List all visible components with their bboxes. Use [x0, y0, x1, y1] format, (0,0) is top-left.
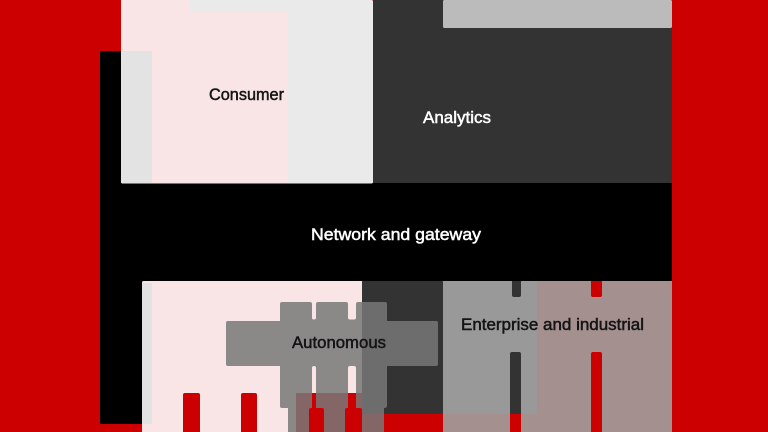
gaps in connector: lower pink notches — [312, 366, 356, 408]
label: consumer: Consumer — [209, 85, 284, 104]
label: analytics: Analytics — [423, 108, 491, 127]
icon: translucent grey connector — [226, 302, 438, 432]
panel: analytics — [373, 0, 672, 183]
panel: autonomous — [142, 281, 443, 432]
bars: red — [510, 281, 602, 432]
bars: dark — [510, 281, 521, 414]
bars: left red — [183, 393, 257, 432]
panel: consumer — [121, 0, 373, 184]
label: network and gateway: Network and gateway — [311, 225, 482, 244]
bars: centre red — [309, 408, 362, 432]
panel: enterprise and industrial — [443, 281, 672, 432]
label: autonomous: Autonomous — [292, 333, 386, 352]
label: enterprise and industrial: Enterprise and industrial — [461, 315, 644, 334]
